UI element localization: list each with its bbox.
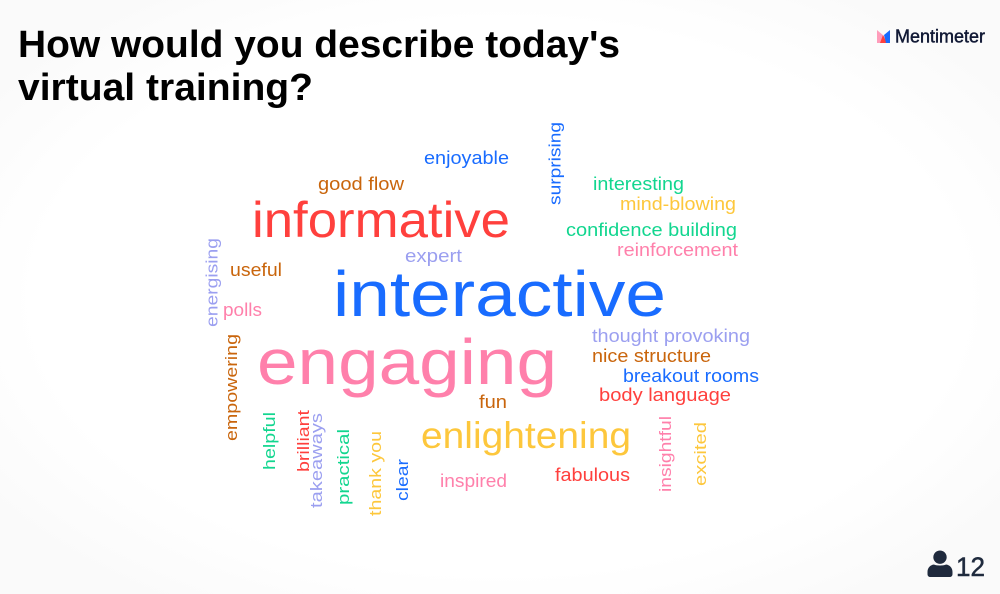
word: surprising: surprising	[546, 122, 564, 205]
word: clear: clear	[393, 459, 412, 501]
word: fabulous: fabulous	[555, 465, 630, 485]
word: practical: practical	[334, 429, 353, 505]
icon: person	[928, 550, 952, 577]
word: brilliant: brilliant	[294, 410, 313, 472]
word: empowering: empowering	[222, 334, 241, 441]
logo: Mentimeter: Mentimeter	[895, 26, 985, 46]
word: enlightening: enlightening	[421, 415, 631, 456]
word: thought provoking: thought provoking	[592, 326, 750, 346]
word: interactive: interactive	[333, 258, 666, 330]
word: informative: informative	[252, 192, 510, 248]
word: body language: body language	[599, 385, 731, 405]
word: good flow: good flow	[318, 174, 405, 194]
word: breakout rooms: breakout rooms	[623, 366, 759, 386]
word: thank you: thank you	[366, 431, 385, 516]
word: polls: polls	[223, 300, 262, 320]
word cloud	[202, 122, 759, 516]
word: confidence building: confidence building	[566, 220, 737, 240]
word: engaging: engaging	[257, 326, 557, 398]
word: excited: excited	[691, 422, 710, 486]
word: useful: useful	[230, 260, 282, 280]
word: energising: energising	[202, 238, 222, 327]
title: How would you describe today's	[18, 24, 620, 66]
word: takeaways: takeaways	[307, 413, 326, 508]
word: expert: expert	[405, 246, 462, 266]
participant count	[928, 550, 985, 582]
word: helpful: helpful	[260, 412, 279, 470]
title	[18, 24, 620, 109]
word: inspired: inspired	[440, 471, 507, 491]
word: fun: fun	[479, 392, 507, 412]
word: interesting: interesting	[593, 174, 684, 194]
title: virtual training?	[18, 67, 313, 109]
word: enjoyable: enjoyable	[424, 148, 509, 168]
word: mind-blowing: mind-blowing	[620, 194, 736, 214]
word: insightful: insightful	[656, 416, 675, 492]
word: reinforcement: reinforcement	[617, 240, 738, 260]
count: 12	[956, 552, 985, 582]
word: nice structure: nice structure	[592, 346, 711, 366]
